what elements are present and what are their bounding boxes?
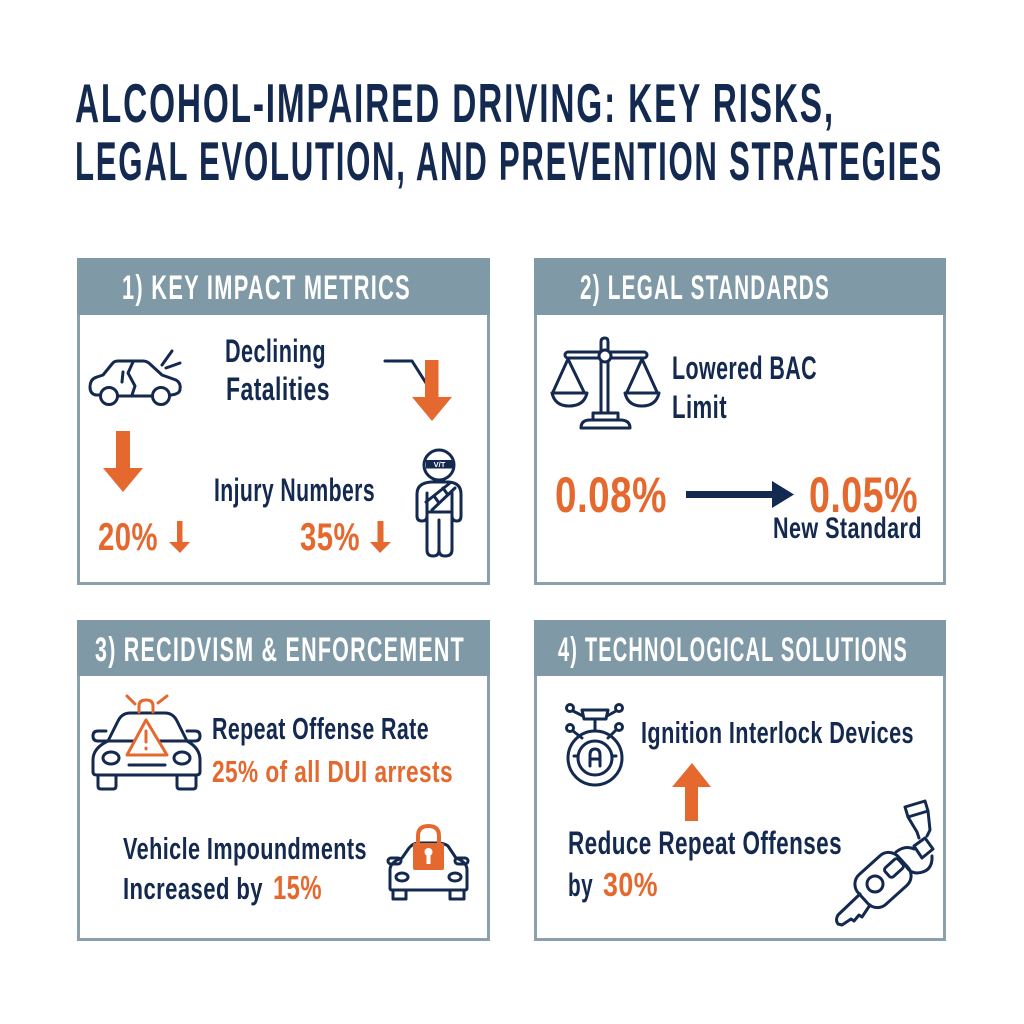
stat: 0.05 percent: 0.05% — [809, 467, 918, 523]
text: declining fatalities: Fatalities — [226, 371, 330, 407]
text: injury numbers: Injury Numbers — [214, 472, 375, 508]
text: reduce repeat offenses: by — [568, 867, 593, 903]
text: reduce repeat offenses: Reduce Repeat Offenses — [568, 825, 842, 861]
text: new standard: New Standard — [773, 512, 922, 545]
icon: police car with warning — [93, 696, 200, 789]
icon: scales of justice — [552, 338, 659, 428]
text: vehicle impoundments: Increased by — [123, 871, 263, 906]
stat: 20 percent down: 20% — [98, 516, 158, 559]
icon: person with seat belt — [417, 450, 461, 556]
text: declining fatalities: Declining — [225, 333, 326, 369]
icon: impounded car with padlock — [388, 826, 468, 899]
panel: technological solutions — [534, 620, 946, 940]
text: vehicle impoundments — [123, 831, 367, 906]
stat: 0.08 percent: 0.08% — [555, 467, 667, 523]
text: lowered BAC limit: Limit — [672, 389, 727, 425]
text: vehicle impoundments: Vehicle Impoundments — [123, 831, 367, 866]
panel: legal standards — [534, 258, 946, 584]
panel header: technological solutions — [534, 620, 946, 676]
stat: 35 percent down: 35% — [300, 516, 360, 559]
panel header: legal standards: 2) LEGAL STANDARDS — [580, 269, 830, 307]
text: repeat offense rate: 25% of all DUI arrests — [212, 754, 453, 789]
panel header: key impact metrics — [77, 258, 490, 315]
text: reduce repeat offenses — [568, 825, 842, 903]
text: ignition interlock devices: Ignition Interlock Devices — [641, 715, 914, 750]
icon: crashed car — [90, 351, 180, 404]
text: repeat offense rate — [212, 711, 453, 789]
text: lowered BAC limit: Lowered BAC — [672, 350, 817, 386]
icon: car key with breathalyzer — [836, 801, 933, 925]
panel header: recidivism and enforcement: 3) RECIDVISM & ENFORCEMENT — [95, 631, 465, 669]
arrow: upward orange — [672, 763, 711, 821]
text: reduce repeat offenses: 30% — [603, 866, 658, 903]
icon: trend line with down arrow — [385, 360, 452, 421]
icon: person with seat belt: V/T — [434, 460, 446, 469]
panel: key impact metrics — [77, 258, 490, 584]
text: repeat offense rate: Repeat Offense Rate — [212, 711, 429, 746]
arrow: old limit to new limit — [686, 481, 794, 508]
panel: recidivism and enforcement — [77, 620, 490, 940]
text: lowered BAC limit — [672, 350, 817, 425]
panel header: key impact metrics: 1) KEY IMPACT METRICS — [122, 269, 411, 307]
panel header: legal standards — [534, 258, 946, 315]
title — [75, 72, 943, 192]
arrow: fatalities down — [103, 431, 143, 492]
text: vehicle impoundments: 15% — [273, 869, 322, 906]
icon: ignition interlock device — [566, 704, 622, 785]
text: declining fatalities — [225, 333, 330, 407]
panel header: recidivism and enforcement — [77, 620, 490, 676]
